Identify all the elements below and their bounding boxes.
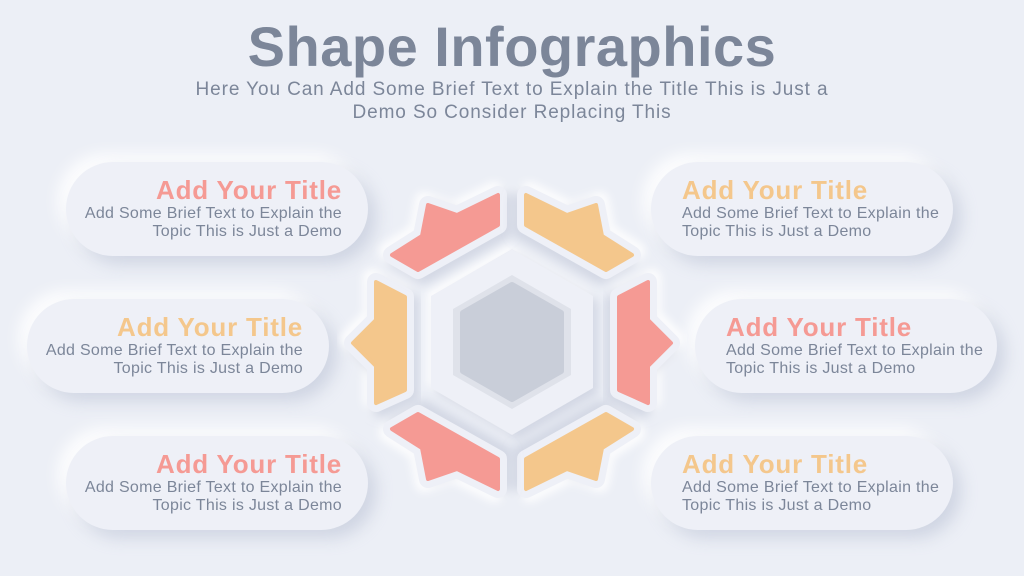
panel: top right: Add Your Title	[682, 175, 868, 205]
arrow: right	[619, 282, 671, 403]
arrow: bottom left	[392, 414, 498, 489]
title: Shape Infographics	[248, 15, 776, 78]
panel: middle left: Topic This is Just a Demo	[114, 360, 303, 376]
arrow: bottom right	[526, 414, 632, 489]
panel: bottom right: Add Some Brief Text to Explain the	[682, 479, 939, 496]
panel: middle left	[27, 299, 329, 393]
panel: bottom right: Topic This is Just a Demo	[682, 496, 872, 514]
panel: bottom left	[66, 436, 368, 530]
panel: top right: Topic This is Just a Demo	[682, 222, 872, 240]
panel: top left: Add Your Title	[156, 175, 342, 205]
panel: bottom left: Add Your Title	[156, 449, 342, 479]
subtitle: Here You Can Add Some Brief Text to Explain the Title This is Just a Demo So Consider Replacing This	[196, 79, 828, 123]
panel: bottom left: Add Some Brief Text to Explain the	[85, 479, 342, 496]
panel: bottom left: Topic This is Just a Demo	[152, 496, 342, 514]
panel: top right	[651, 162, 953, 256]
panel: top right: Add Some Brief Text to Explain the	[682, 205, 939, 222]
panel: top left: Add Some Brief Text to Explain the	[85, 205, 342, 222]
outer hexagon plate	[431, 249, 593, 435]
panel: bottom right	[651, 436, 953, 530]
arrow: top left	[392, 195, 498, 270]
panel: bottom right: Add Your Title	[682, 449, 868, 479]
panel: middle left: Add Your Title	[117, 312, 303, 342]
panel: top left	[66, 162, 368, 256]
inner gray hexagon	[453, 275, 571, 409]
panel: middle left: Add Some Brief Text to Explain the	[46, 342, 303, 359]
panel: middle right: Add Some Brief Text to Explain the	[726, 342, 983, 359]
panel: middle right	[695, 299, 997, 393]
panel: middle right: Add Your Title	[726, 312, 912, 342]
panel: top left: Topic This is Just a Demo	[152, 222, 342, 240]
panel: middle right: Topic This is Just a Demo	[726, 360, 916, 376]
arrow: left	[353, 282, 405, 403]
arrow: top right	[526, 195, 632, 270]
